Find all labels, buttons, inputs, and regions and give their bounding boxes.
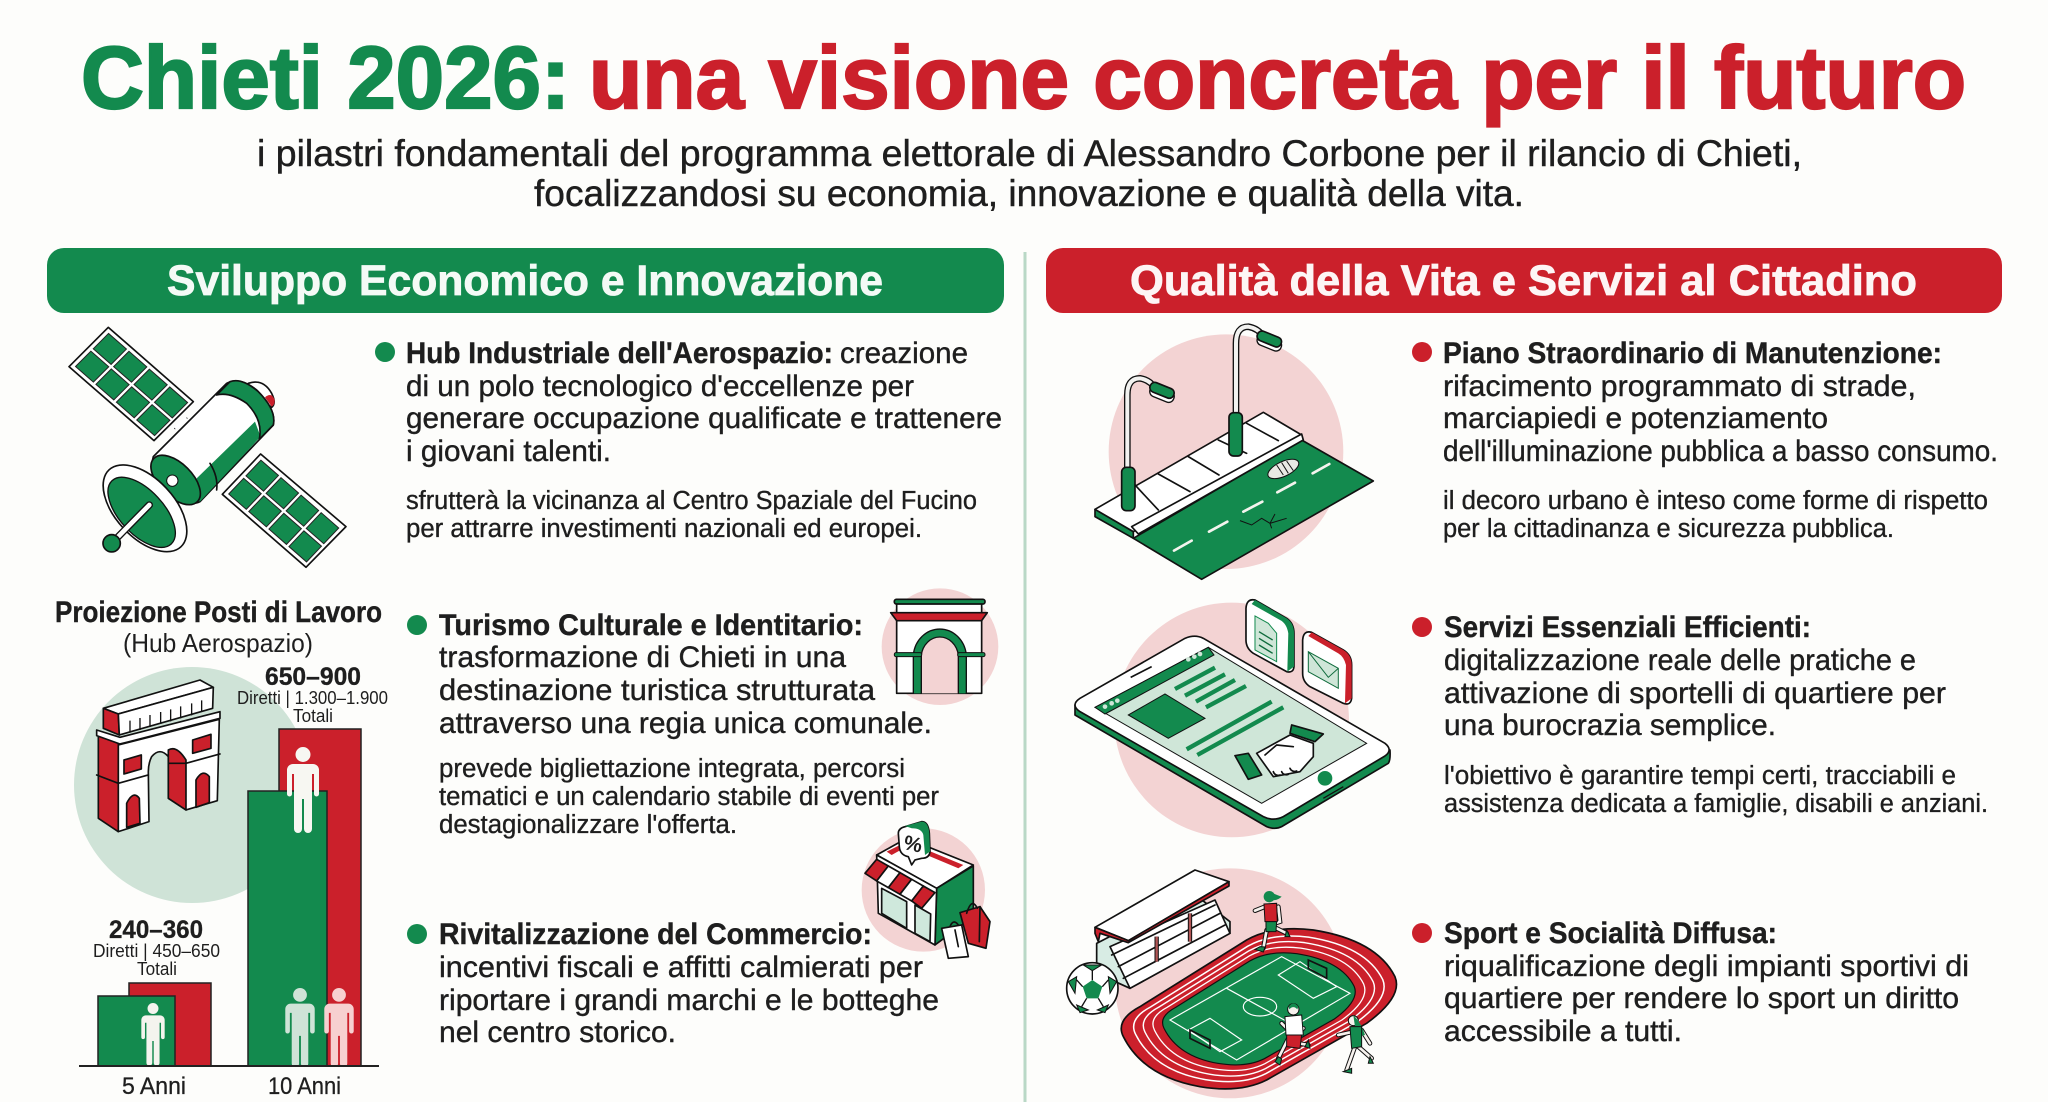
bullet text: Commercio: Rivitalizzazione del Commercio: xyxy=(439,918,872,951)
bullet text: Turismo: trasformazione di Chieti in una xyxy=(439,641,846,674)
value labels: 5 years xyxy=(93,916,220,979)
bullet text: Hub Industriale: di un polo tecnologico d'eccellenze per xyxy=(406,370,914,403)
bullet text: Sport: Sport e Socialità Diffusa: xyxy=(1444,917,1777,950)
value labels: 5 years: 240–360 xyxy=(109,916,203,944)
bullet text: Turismo: prevede bigliettazione integrata, percorsi xyxy=(439,755,905,783)
bullet text: Sport: riqualificazione degli impianti sportivi di xyxy=(1444,950,1969,983)
chart title: (Hub Aerospazio) xyxy=(123,628,313,658)
bullet text: Hub Industriale: generare occupazione qualificate e trattenere xyxy=(406,402,1002,435)
running track xyxy=(1121,929,1397,1089)
bullet text: Manutenzione: per la cittadinanza e sicurezza pubblica. xyxy=(1443,515,1894,543)
value labels: 10 years: Totali xyxy=(293,706,333,726)
axis labels: 10 Anni xyxy=(268,1073,341,1100)
bullet text: Servizi: attivazione di sportelli di quartiere per xyxy=(1444,677,1946,710)
icon: triumphal arch xyxy=(97,680,220,832)
chart: projected jobs xyxy=(55,596,388,1100)
bullet text: Hub Industriale: per attrarre investimenti nazionali ed europei. xyxy=(406,515,922,543)
heading: right panel xyxy=(1046,248,2002,313)
heading: left panel: Sviluppo Economico e Innovazione xyxy=(167,257,883,305)
value labels: 10 years: 650–900 xyxy=(265,663,361,691)
bullet text: Hub Industriale: sfrutterà la vicinanza al Centro Spaziale del Fucino xyxy=(406,487,977,515)
bullet text: Servizi: una burocrazia semplice. xyxy=(1444,709,1776,742)
bullet text: Turismo: Turismo Culturale e Identitario: xyxy=(439,609,863,642)
bullet text: Manutenzione xyxy=(1412,337,1998,543)
bars: 5 years xyxy=(98,983,211,1066)
bullet text: Manutenzione: marciapiedi e potenziamento xyxy=(1443,402,1828,435)
value labels: 10 years xyxy=(237,663,388,726)
bullet text: Commercio: riportare i grandi marchi e le botteghe xyxy=(439,984,939,1017)
bullet text: Hub Industriale: creazione xyxy=(840,337,968,370)
bullet text: Turismo: destagionalizzare l'offerta. xyxy=(439,811,737,839)
bullet text: Commercio: nel centro storico. xyxy=(439,1016,676,1049)
bullet text: Manutenzione: Piano Straordinario di Manutenzione: xyxy=(1443,337,1942,370)
icon: city gate xyxy=(882,588,998,705)
runners xyxy=(1255,891,1373,1073)
icon: document card xyxy=(1246,600,1294,672)
bullet text: Servizi: digitalizzazione reale delle pratiche e xyxy=(1444,644,1916,677)
chart title: Proiezione Posti di Lavoro xyxy=(55,596,382,629)
icon: mail card xyxy=(1303,632,1352,704)
axis labels: 5 Anni xyxy=(122,1073,186,1100)
icon: satellite xyxy=(69,327,346,567)
subtitle: focalizzandosi su economia, innovazione e qualità della vita. xyxy=(534,173,1524,214)
value labels: 5 years: Totali xyxy=(137,959,177,979)
icon: stadium xyxy=(1067,868,1397,1098)
bullet text: Servizi: assistenza dedicata a famiglie, disabili e anziani. xyxy=(1444,790,1988,818)
value labels: 10 years: Diretti | 1.300–1.900 xyxy=(237,688,388,708)
bullet text: Sport: quartiere per rendere lo sport un diritto xyxy=(1444,982,1959,1015)
subtitle xyxy=(257,133,1802,214)
bullet text: Turismo: attraverso una regia unica comunale. xyxy=(439,707,932,740)
bullet text: Turismo: destinazione turistica strutturata xyxy=(439,674,875,707)
bullet text: Hub Industriale: Hub Industriale dell'Aerospazio: xyxy=(406,337,833,370)
subtitle: i pilastri fondamentali del programma elettorale di Alessandro Corbone per il rilancio di Chieti, xyxy=(257,133,1802,174)
bullet text: Manutenzione: dell'illuminazione pubblica a basso consumo. xyxy=(1443,435,1998,468)
bullet text: Servizi: l'obiettivo è garantire tempi certi, tracciabili e xyxy=(1444,762,1956,790)
grandstand xyxy=(1095,870,1230,988)
bullet text: Sport: accessibile a tutti. xyxy=(1444,1015,1682,1048)
heading: left panel xyxy=(47,248,1004,313)
bullet text: Commercio xyxy=(407,918,939,1049)
chart title xyxy=(55,596,382,658)
bullet text: Turismo xyxy=(407,609,940,839)
bullet text: Sport xyxy=(1412,917,1969,1048)
bars: 10 years xyxy=(248,729,361,1067)
bullet text: Turismo: tematici e un calendario stabile di eventi per xyxy=(439,783,940,811)
title: Chieti 2026: xyxy=(81,28,570,127)
bullet text: Hub Industriale xyxy=(375,337,1002,543)
icon: shop with bags xyxy=(862,822,990,958)
heading: right panel: Qualità della Vita e Servizi al Cittadino xyxy=(1130,257,1917,305)
bullet text: Manutenzione: il decoro urbano è inteso come forme di rispetto xyxy=(1443,487,1988,515)
axis labels xyxy=(122,1073,341,1100)
value labels: 5 years: Diretti | 450–650 xyxy=(93,941,220,961)
bullet text: Servizi: Servizi Essenziali Efficienti: xyxy=(1444,611,1811,644)
title: una visione concreta per il futuro xyxy=(589,28,1966,127)
bullet text: Manutenzione: rifacimento programmato di strade, xyxy=(1443,370,1916,403)
icon: handshake xyxy=(1235,725,1323,779)
icon: street with lamps xyxy=(1095,327,1373,579)
bullet text: Hub Industriale: i giovani talenti. xyxy=(406,435,611,468)
bullet text: Servizi xyxy=(1412,611,1988,818)
icon: shop with bags: % xyxy=(902,831,924,858)
soccer ball xyxy=(1067,963,1118,1014)
icon: tablet with handshake xyxy=(1075,600,1390,837)
bullet text: Commercio: incentivi fiscali e affitti calmierati per xyxy=(439,951,923,984)
